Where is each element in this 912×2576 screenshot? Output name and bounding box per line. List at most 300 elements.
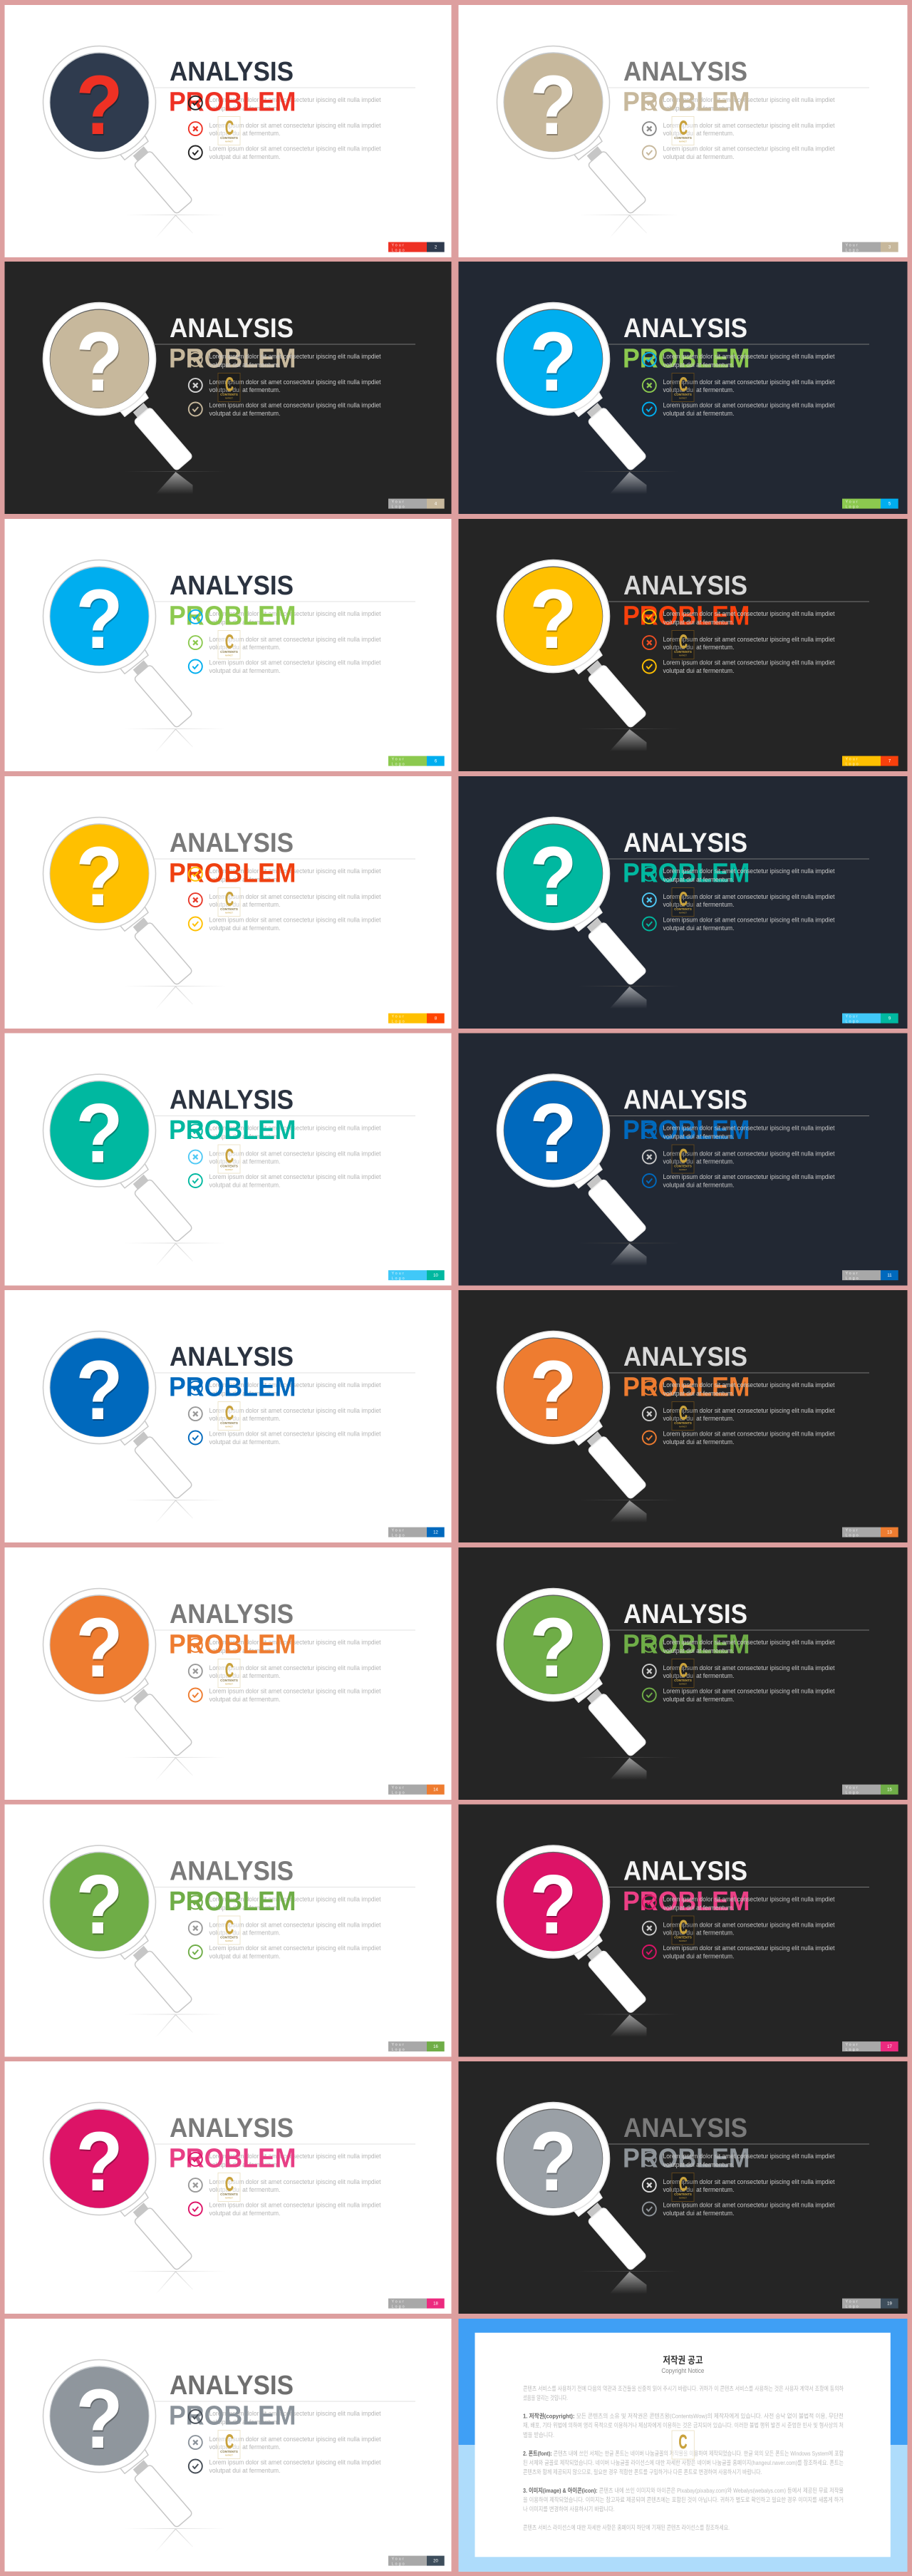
question mark: ? — [529, 1601, 577, 1695]
question mark: ? — [76, 1858, 123, 1952]
watermark badge: MARKET — [225, 1168, 233, 1171]
notice subtitle: Copyright Notice — [661, 2367, 704, 2374]
lens disc — [50, 1596, 148, 1694]
slide 3: tan lens on white — [459, 5, 908, 257]
bullet text: volutpat dui at fermentum. — [209, 2210, 281, 2217]
magnifying glass frame — [43, 2360, 225, 2552]
bullet text — [209, 1124, 381, 1189]
notice body text: 1. 저작권(copyright): 모든 콘텐츠의 소유 및 저작권은 콘텐츠왕(ContentsWow)의 제작자에게 있습니다. 사전 승낙 없이 불법적 이용, 무단전 — [523, 2412, 844, 2419]
bullet icons — [643, 1381, 656, 1444]
bullet icons — [643, 96, 656, 160]
slide 18: pink lens on white — [4, 2061, 452, 2314]
bullet text: volutpat dui at fermentum. — [209, 2418, 281, 2426]
bullet text: Lorem ipsum dolor sit amet consectetur ipiscing elit nulla impdiet — [209, 917, 381, 924]
bullet text: Lorem ipsum dolor sit amet consectetur ipiscing elit nulla impdiet — [209, 867, 381, 875]
magnifying glass frame — [497, 818, 680, 1009]
bullet text: volutpat dui at fermentum. — [663, 1133, 734, 1140]
footer logo bar — [388, 1014, 445, 1024]
watermark badge — [672, 373, 694, 402]
bullet text: volutpat dui at fermentum. — [663, 130, 734, 138]
heading: problem: PROBLEM — [623, 344, 750, 373]
bullet text: volutpat dui at fermentum. — [663, 2210, 734, 2217]
bullet text: volutpat dui at fermentum. — [663, 1415, 734, 1423]
watermark badge: CONTENTS — [220, 2193, 238, 2196]
magnifying glass frame — [497, 303, 680, 494]
footer logo bar: Your — [845, 1015, 859, 1019]
notice body text: 3. 이미지(image) & 아이콘(icon): 콘텐츠 내에 쓰인 이미지와 아이콘은 Pixabay(pixabay.com)와 Webalys(webalys.com) 등에서 제공된 무료 저작물 — [523, 2487, 844, 2494]
bullet icons — [189, 1639, 202, 1702]
lens disc — [50, 1853, 148, 1951]
bullet text: Lorem ipsum dolor sit amet consectetur ipiscing elit nulla impdiet — [209, 2201, 381, 2210]
notice body text: 나 이미지를 변경하여 사용하시기 바랍니다. — [523, 2505, 615, 2513]
bullet text: volutpat dui at fermentum. — [209, 410, 281, 418]
watermark badge — [218, 888, 240, 917]
footer logo bar — [388, 1527, 445, 1538]
bullet text: volutpat dui at fermentum. — [209, 619, 281, 627]
heading: analysis: ANALYSIS — [170, 314, 294, 344]
bullet text: volutpat dui at fermentum. — [209, 2161, 281, 2169]
bullet text: volutpat dui at fermentum. — [209, 361, 281, 369]
footer logo bar: Logo — [392, 763, 406, 767]
bullet icons — [189, 2153, 202, 2215]
bullet text: volutpat dui at fermentum. — [209, 667, 281, 675]
footer logo bar: 8 — [435, 1017, 437, 1021]
notice body text: 을 이용하여 제작되었습니다. 이미지는 참고자료 제공되며 콘텐츠에는 포함된 것이 아닙니다. 귀하가 별도로 확인하고 필요한 경우 이미지를 새롭게 하거 — [523, 2496, 844, 2503]
watermark badge: MARKET — [679, 1426, 687, 1428]
bullet text: volutpat dui at fermentum. — [209, 1181, 281, 1189]
heading: analysis: ANALYSIS — [623, 828, 747, 858]
question mark: ? — [529, 1858, 577, 1952]
bullet text — [663, 1639, 835, 1704]
heading: problem: PROBLEM — [169, 344, 296, 373]
footer logo bar: 19 — [887, 2302, 892, 2307]
footer logo bar — [388, 2041, 445, 2052]
lens disc — [50, 825, 148, 923]
footer logo bar — [388, 2556, 445, 2567]
footer logo bar: Your — [392, 1272, 405, 1276]
watermark badge: C — [225, 2431, 234, 2452]
bullet text: volutpat dui at fermentum. — [663, 901, 734, 909]
bullet text: Lorem ipsum dolor sit amet consectetur ipiscing elit nulla impdiet — [663, 2178, 835, 2186]
slide 2: navy lens with red question mark on white — [4, 5, 452, 257]
bullet text: Lorem ipsum dolor sit amet consectetur ipiscing elit nulla impdiet — [209, 96, 381, 104]
footer logo bar: Your — [845, 1528, 859, 1532]
footer logo bar: 14 — [433, 1788, 438, 1793]
lens disc — [50, 567, 148, 666]
bullet text: volutpat dui at fermentum. — [209, 386, 281, 394]
bullet icons — [643, 1124, 656, 1187]
bullet text: Lorem ipsum dolor sit amet consectetur ipiscing elit nulla impdiet — [663, 659, 835, 667]
bullet text: volutpat dui at fermentum. — [663, 1181, 734, 1189]
watermark badge — [672, 1145, 694, 1173]
footer logo bar — [388, 1270, 445, 1281]
background — [4, 2319, 452, 2572]
background — [4, 5, 452, 257]
footer logo bar — [842, 242, 898, 253]
bullet text: volutpat dui at fermentum. — [209, 876, 281, 884]
bullet text — [209, 610, 381, 675]
footer logo bar — [842, 1014, 898, 1024]
bullet text — [209, 1381, 381, 1446]
question mark: ? — [76, 1344, 123, 1438]
heading: problem: PROBLEM — [169, 87, 296, 117]
notice background: blue top band — [459, 2319, 908, 2445]
heading: analysis: ANALYSIS — [623, 1342, 747, 1372]
bullet text: Lorem ipsum dolor sit amet consectetur ipiscing elit nulla impdiet — [663, 1173, 835, 1181]
watermark badge: CONTENTS — [220, 907, 238, 911]
question mark: ? — [76, 1086, 123, 1181]
bullet text — [209, 353, 381, 418]
footer logo bar: 12 — [433, 1531, 438, 1535]
magnifying glass frame — [497, 1845, 680, 2037]
bullet text: Lorem ipsum dolor sit amet consectetur ipiscing elit nulla impdiet — [663, 2201, 835, 2210]
bullet text: volutpat dui at fermentum. — [663, 153, 734, 161]
bullet text: Lorem ipsum dolor sit amet consectetur ipiscing elit nulla impdiet — [209, 122, 381, 130]
bullet text: Lorem ipsum dolor sit amet consectetur ipiscing elit nulla impdiet — [209, 378, 381, 386]
bullet text — [663, 1124, 835, 1189]
lens disc — [504, 1596, 603, 1694]
watermark badge — [218, 1916, 240, 1944]
bullet text: volutpat dui at fermentum. — [663, 1438, 734, 1446]
bullet text: Lorem ipsum dolor sit amet consectetur ipiscing elit nulla impdiet — [209, 1688, 381, 1695]
heading: analysis: ANALYSIS — [623, 314, 747, 344]
bullet text — [209, 867, 381, 932]
footer logo bar: Logo — [845, 2048, 860, 2052]
footer logo bar: Your — [392, 1786, 405, 1791]
magnifying glass frame — [43, 2103, 225, 2294]
slide 19: grey lens on charcoal — [459, 2061, 908, 2314]
watermark badge: C — [225, 1401, 234, 1424]
bullet text: Lorem ipsum dolor sit amet consectetur ipiscing elit nulla impdiet — [663, 1124, 835, 1132]
bullet text: volutpat dui at fermentum. — [663, 924, 734, 932]
watermark badge — [672, 2173, 694, 2201]
footer logo bar: Logo — [392, 1277, 406, 1281]
watermark badge: C — [679, 1145, 688, 1167]
bullet text — [663, 1895, 835, 1960]
bullet text: Lorem ipsum dolor sit amet consectetur ipiscing elit nulla impdiet — [209, 1173, 381, 1181]
notice body text — [523, 2385, 844, 2531]
watermark badge: MARKET — [679, 396, 687, 399]
bullet text: Lorem ipsum dolor sit amet consectetur ipiscing elit nulla impdiet — [209, 636, 381, 644]
watermark badge: MARKET — [225, 2453, 233, 2456]
heading: problem: PROBLEM — [169, 1887, 296, 1917]
slide 11: royal-blue lens on navy — [459, 1034, 908, 1286]
bullet text: Lorem ipsum dolor sit amet consectetur ipiscing elit nulla impdiet — [209, 2410, 381, 2418]
footer logo bar: Your — [392, 2043, 405, 2047]
lens disc — [50, 2110, 148, 2208]
bullet text: Lorem ipsum dolor sit amet consectetur ipiscing elit nulla impdiet — [663, 917, 835, 924]
watermark badge — [218, 630, 240, 659]
bullet text: volutpat dui at fermentum. — [209, 1904, 281, 1912]
footer logo bar — [842, 1270, 898, 1281]
watermark badge: MARKET — [225, 1426, 233, 1428]
background — [459, 2061, 908, 2314]
footer logo bar: Logo — [845, 249, 860, 253]
background — [4, 2061, 452, 2314]
heading: problem: PROBLEM — [623, 1629, 750, 1659]
watermark badge: C — [679, 117, 688, 138]
question mark: ? — [529, 1086, 577, 1181]
bullet text: Lorem ipsum dolor sit amet consectetur ipiscing elit nulla impdiet — [663, 2153, 835, 2160]
watermark badge: C — [679, 888, 688, 910]
watermark badge: MARKET — [225, 396, 233, 399]
background — [4, 519, 452, 771]
notice background: pale blue bottom band — [459, 2445, 908, 2572]
notice body text: 재, 배포, 기타 위법에 의하여 영리 목적으로 이용하거나 제삼자에게 이용하는 것은 금지되어 있습니다. 이러한 불법 행위 발견 시 준엄한 민사 및 형사상의 처 — [523, 2422, 844, 2429]
slide 7: yellow lens on charcoal — [459, 519, 908, 771]
bullet text: volutpat dui at fermentum. — [209, 1929, 281, 1937]
notice body text: 된 서체와 글꼴로 제작되었습니다. 네이버 나눔글꼴 라이선스에 대한 자세한 사항은 네이버 나눔글꼴 홈페이지(hangeul.naver.com)를 참조하세요. 폰트는 — [523, 2459, 844, 2466]
heading: analysis: ANALYSIS — [170, 57, 294, 87]
watermark badge: MARKET — [679, 1168, 687, 1171]
watermark badge: CONTENTS — [674, 650, 692, 654]
watermark badge: C — [679, 1401, 688, 1424]
watermark badge: CONTENTS — [674, 1679, 692, 1682]
watermark badge: CONTENTS — [674, 136, 692, 140]
bullet text — [209, 96, 381, 161]
magnifying glass frame — [497, 1074, 680, 1266]
notice body text: 콘텐츠와 함께 제공되지 않으므로, 필요한 경우 적합한 폰트를 구입하거나 다른 폰트로 변경하여 사용하시기 바랍니다. — [523, 2468, 762, 2475]
footer logo bar — [842, 1785, 898, 1796]
watermark badge: C — [679, 630, 688, 653]
watermark badge: CONTENTS — [220, 1421, 238, 1425]
bullet text: volutpat dui at fermentum. — [209, 1390, 281, 1398]
bullet text: Lorem ipsum dolor sit amet consectetur ipiscing elit nulla impdiet — [209, 1150, 381, 1158]
footer logo bar: Your — [845, 1786, 859, 1791]
bullet text: Lorem ipsum dolor sit amet consectetur ipiscing elit nulla impdiet — [663, 1921, 835, 1929]
bullet text: volutpat dui at fermentum. — [209, 1672, 281, 1680]
watermark badge: MARKET — [225, 911, 233, 914]
slide 15: green lens on charcoal — [459, 1547, 908, 1800]
watermark badge: CONTENTS — [220, 2450, 238, 2453]
magnifying glass frame — [43, 560, 225, 752]
footer logo bar: Your — [392, 2557, 405, 2562]
watermark badge: CONTENTS — [674, 1421, 692, 1425]
watermark badge: CONTENTS — [674, 1936, 692, 1939]
bullet text: Lorem ipsum dolor sit amet consectetur ipiscing elit nulla impdiet — [663, 636, 835, 644]
footer logo bar: Logo — [392, 1791, 406, 1796]
bullet text: Lorem ipsum dolor sit amet consectetur ipiscing elit nulla impdiet — [209, 145, 381, 153]
heading: analysis: ANALYSIS — [623, 57, 747, 87]
bullet text: volutpat dui at fermentum. — [663, 2186, 734, 2194]
question mark: ? — [529, 58, 577, 153]
notice white panel — [475, 2333, 891, 2557]
watermark badge: MARKET — [225, 1682, 233, 1685]
question mark: ? — [76, 2115, 123, 2209]
footer logo bar: Your — [845, 757, 859, 761]
question mark: ? — [76, 58, 123, 153]
bullet text: volutpat dui at fermentum. — [663, 2161, 734, 2169]
bullet text: Lorem ipsum dolor sit amet consectetur ipiscing elit nulla impdiet — [209, 1407, 381, 1415]
heading: problem: PROBLEM — [169, 2143, 296, 2173]
heading: analysis: ANALYSIS — [170, 571, 294, 601]
watermark badge — [672, 1401, 694, 1430]
bullet text: Lorem ipsum dolor sit amet consectetur ipiscing elit nulla impdiet — [663, 145, 835, 153]
footer logo bar: Your — [845, 2043, 859, 2047]
footer logo bar — [842, 2299, 898, 2309]
lens disc — [50, 1339, 148, 1437]
bullet text: Lorem ipsum dolor sit amet consectetur ipiscing elit nulla impdiet — [209, 353, 381, 361]
bullet text — [663, 353, 835, 418]
background — [4, 262, 452, 514]
footer logo bar: Your — [845, 1272, 859, 1276]
footer logo bar — [388, 1785, 445, 1796]
bullet text — [663, 867, 835, 932]
bullet text: volutpat dui at fermentum. — [663, 1929, 734, 1937]
footer logo bar: Logo — [845, 1277, 860, 1281]
magnifying glass frame — [43, 1589, 225, 1781]
background — [459, 1805, 908, 2057]
slide 5: sky-blue lens on navy — [459, 262, 908, 514]
bullet text: volutpat dui at fermentum. — [209, 1438, 281, 1446]
footer logo bar: 15 — [887, 1788, 892, 1793]
magnifying glass frame — [43, 1331, 225, 1523]
bullet text: Lorem ipsum dolor sit amet consectetur ipiscing elit nulla impdiet — [663, 353, 835, 361]
lens disc — [50, 310, 148, 408]
heading: analysis: ANALYSIS — [623, 1085, 747, 1115]
watermark badge: C — [225, 1659, 234, 1681]
heading: analysis: ANALYSIS — [170, 1599, 294, 1629]
bullet text — [663, 610, 835, 675]
heading: problem: PROBLEM — [623, 2143, 750, 2173]
footer logo bar: Your — [392, 757, 405, 761]
bullet text: Lorem ipsum dolor sit amet consectetur ipiscing elit nulla impdiet — [663, 867, 835, 875]
slide 12: royal-blue lens on white — [4, 1290, 452, 1542]
watermark badge: MARKET — [679, 654, 687, 657]
footer logo bar: Your — [845, 500, 859, 505]
heading: analysis: ANALYSIS — [623, 1856, 747, 1886]
watermark badge: MARKET — [225, 1939, 233, 1942]
heading: problem: PROBLEM — [169, 1629, 296, 1659]
bullet icons — [189, 1124, 202, 1187]
lens disc — [504, 567, 603, 666]
footer logo bar: Logo — [392, 505, 406, 510]
bullet text: Lorem ipsum dolor sit amet consectetur ipiscing elit nulla impdiet — [663, 122, 835, 130]
bullet text: volutpat dui at fermentum. — [663, 619, 734, 627]
bullet text: volutpat dui at fermentum. — [209, 1415, 281, 1423]
footer logo bar: Logo — [392, 249, 406, 253]
bullet text: Lorem ipsum dolor sit amet consectetur ipiscing elit nulla impdiet — [209, 1944, 381, 1952]
background — [4, 776, 452, 1029]
bullet text: Lorem ipsum dolor sit amet consectetur ipiscing elit nulla impdiet — [209, 659, 381, 667]
bullet text: volutpat dui at fermentum. — [209, 2443, 281, 2451]
question mark: ? — [76, 2372, 123, 2466]
footer logo bar: 2 — [435, 246, 437, 250]
bullet text: Lorem ipsum dolor sit amet consectetur ipiscing elit nulla impdiet — [663, 1895, 835, 1903]
notice body text: 2. 폰트(font): 콘텐츠 내에 쓰인 서체는 한글 폰트는 네이버 나눔글꼴의 저작물을 이용하여 제작되었습니다. 한글 외의 모든 폰트는 Windows System에 포함 — [523, 2450, 844, 2457]
bullet text: volutpat dui at fermentum. — [663, 1696, 734, 1704]
bullet text: volutpat dui at fermentum. — [663, 667, 734, 675]
bullet text: Lorem ipsum dolor sit amet consectetur ipiscing elit nulla impdiet — [209, 1381, 381, 1389]
bullet text: Lorem ipsum dolor sit amet consectetur ipiscing elit nulla impdiet — [209, 610, 381, 618]
lens disc — [504, 1339, 603, 1437]
bullet text: Lorem ipsum dolor sit amet consectetur ipiscing elit nulla impdiet — [663, 378, 835, 386]
watermark badge: CONTENTS — [220, 1165, 238, 1168]
bullet icons — [189, 610, 202, 673]
magnifying glass frame — [43, 1845, 225, 2037]
bullet icons — [189, 96, 202, 160]
bullet icons — [189, 2410, 202, 2473]
bullet icons — [643, 867, 656, 931]
watermark badge: C — [225, 1145, 234, 1167]
bullet text: volutpat dui at fermentum. — [209, 1158, 281, 1165]
watermark badge: CONTENTS — [220, 136, 238, 140]
footer logo bar — [388, 756, 445, 767]
watermark badge: CONTENTS — [220, 393, 238, 396]
heading: analysis: ANALYSIS — [623, 2113, 747, 2143]
footer logo bar: 7 — [888, 760, 891, 764]
watermark badge — [218, 117, 240, 145]
heading: problem: PROBLEM — [623, 1116, 750, 1145]
watermark badge: C — [225, 373, 234, 395]
heading: analysis: ANALYSIS — [170, 1342, 294, 1372]
footer logo bar: Your — [392, 244, 405, 248]
background — [459, 519, 908, 771]
lens disc — [504, 825, 603, 923]
lens disc — [50, 1081, 148, 1180]
bullet text: volutpat dui at fermentum. — [209, 153, 281, 161]
watermark badge: CONTENTS — [220, 1936, 238, 1939]
footer logo bar: Your — [845, 2299, 859, 2304]
magnifying glass frame — [43, 818, 225, 1009]
watermark badge: C — [225, 888, 234, 910]
footer logo bar: Your — [845, 244, 859, 248]
footer logo bar: Your — [392, 2299, 405, 2304]
bullet icons — [643, 2153, 656, 2215]
bullet text: Lorem ipsum dolor sit amet consectetur ipiscing elit nulla impdiet — [663, 893, 835, 901]
footer logo bar: Your — [392, 1528, 405, 1532]
bullet icons — [643, 353, 656, 416]
watermark badge: C — [679, 2173, 688, 2195]
bullet icons — [189, 1895, 202, 1959]
bullet text: Lorem ipsum dolor sit amet consectetur ipiscing elit nulla impdiet — [663, 1688, 835, 1695]
watermark badge: C — [225, 2173, 234, 2195]
question mark: ? — [76, 572, 123, 666]
footer logo bar: Logo — [392, 1020, 406, 1024]
footer logo bar — [388, 242, 445, 253]
footer logo bar — [842, 499, 898, 510]
bullet icons — [643, 610, 656, 673]
footer logo bar: 17 — [887, 2045, 892, 2049]
watermark badge: MARKET — [679, 1682, 687, 1685]
bullet text: Lorem ipsum dolor sit amet consectetur ipiscing elit nulla impdiet — [209, 1921, 381, 1929]
lens disc — [504, 310, 603, 408]
bullet text: Lorem ipsum dolor sit amet consectetur ipiscing elit nulla impdiet — [209, 1430, 381, 1438]
footer logo bar — [842, 756, 898, 767]
magnifying glass frame — [43, 303, 225, 494]
bullet text: volutpat dui at fermentum. — [663, 1904, 734, 1912]
bullet text: Lorem ipsum dolor sit amet consectetur ipiscing elit nulla impdiet — [663, 1407, 835, 1415]
copyright notice slide — [459, 2319, 908, 2572]
bullet icons — [189, 867, 202, 931]
heading: problem: PROBLEM — [623, 87, 750, 117]
heading: analysis: ANALYSIS — [170, 828, 294, 858]
watermark badge: C — [679, 373, 688, 395]
footer logo bar: 4 — [435, 503, 437, 507]
slide 14: orange lens on white — [4, 1547, 452, 1800]
question mark: ? — [76, 830, 123, 924]
watermark badge: CONTENTS — [674, 2193, 692, 2196]
footer logo bar — [842, 2041, 898, 2052]
watermark badge — [672, 1916, 694, 1944]
bullet text: volutpat dui at fermentum. — [209, 924, 281, 932]
bullet text: volutpat dui at fermentum. — [209, 130, 281, 138]
footer logo bar: 10 — [433, 1274, 438, 1278]
bullet icons — [189, 1381, 202, 1444]
bullet text: volutpat dui at fermentum. — [663, 1672, 734, 1680]
watermark badge: C — [225, 117, 234, 138]
bullet text: volutpat dui at fermentum. — [663, 876, 734, 884]
